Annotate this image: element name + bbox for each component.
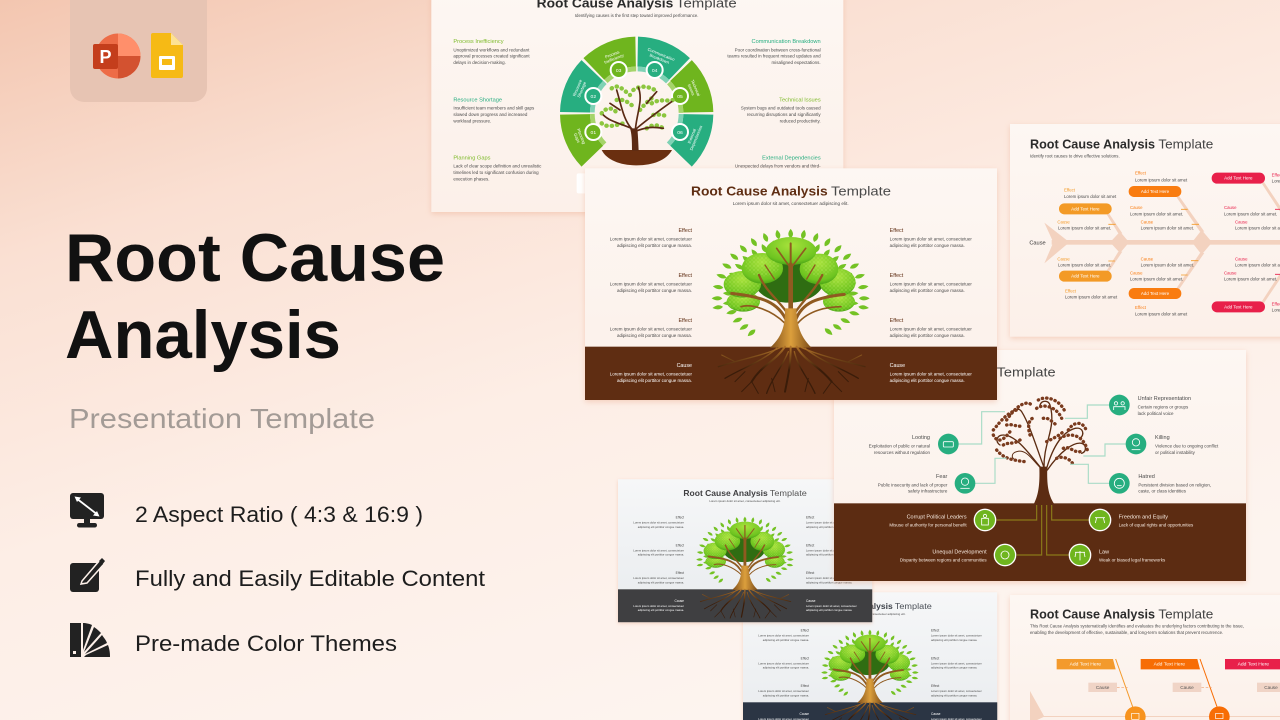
right causes: teams resulted in frequent missed updates and	[727, 54, 821, 59]
heading: Identifying causes is the first step toward improved performance.	[575, 13, 698, 18]
text blocks: Lorem ipsum dolor sit amet, consectetuer	[806, 576, 857, 580]
lower labels: Corrupt Political Leaders	[907, 514, 967, 520]
panel: bottom fishbone slide	[1010, 595, 1280, 720]
text blocks: Lorem ipsum dolor sit amet, consectetuer	[633, 548, 684, 552]
fishbone labels: Cause	[1141, 256, 1154, 261]
left text blocks: adipiscing elit porttitor congue massa.	[617, 378, 692, 383]
wheel centre tree	[602, 87, 673, 165]
fishbone diagram: Cause	[1180, 685, 1194, 690]
upper labels: Persistent division based on religion,	[1138, 482, 1211, 487]
wheel diagram: Dependencies	[689, 125, 703, 151]
upper labels: or political instability	[1155, 450, 1196, 455]
right text blocks: Effect	[890, 273, 904, 279]
wheel diagram: Communication	[647, 47, 676, 62]
wheel diagram: Issues	[687, 83, 696, 96]
right causes: External Dependencies	[762, 155, 821, 161]
text blocks: adipiscing elit porttitor congue massa.	[806, 525, 853, 529]
fishbone labels: Cause	[1235, 219, 1248, 224]
left causes: execution phases.	[453, 176, 489, 181]
left text blocks: Cause	[677, 363, 692, 369]
left causes: slowed down progress and increased	[453, 112, 528, 117]
text blocks: Lorem ipsum dolor sit amet, consectetuer	[758, 634, 809, 638]
right text blocks: Lorem ipsum dolor sit amet, consectetuer	[890, 371, 972, 376]
text blocks: Effect	[801, 684, 809, 688]
fishbone labels: Effect	[1135, 305, 1147, 310]
right causes: Poor coordination between cross-functional	[735, 47, 821, 52]
left text blocks: adipiscing elit porttitor congue massa.	[617, 288, 692, 293]
heading	[1030, 607, 1244, 635]
fishbone labels: Lorem ipsum dolor sit amet.	[1224, 211, 1277, 216]
fishbone pills: Add Text Here	[1141, 291, 1170, 296]
left causes: Insufficient team members and skill gaps	[453, 106, 535, 111]
heading: Template	[895, 602, 932, 611]
fishbone labels: Lorem ipsum dolor sit amet	[1135, 177, 1188, 182]
teal icon circles	[938, 395, 1146, 494]
text blocks: Effect	[676, 543, 684, 547]
fishbone labels: Effect	[1065, 288, 1077, 293]
icon: edit pencil	[70, 558, 105, 592]
tree illustration	[712, 229, 870, 393]
text blocks: adipiscing elit porttitor congue massa.	[638, 608, 684, 612]
left causes: Planning Gaps	[453, 155, 491, 161]
upper labels: caste, or class identities	[1138, 489, 1187, 494]
upper labels: Fear	[936, 474, 948, 480]
wheel diagram: Technical	[690, 79, 701, 97]
fishbone labels: Cause	[1029, 240, 1046, 246]
icon: colour fan	[70, 623, 110, 657]
lower labels: Weak or biased legal frameworks	[1099, 558, 1166, 563]
upper labels: Looting	[912, 435, 930, 441]
lower labels: Lack of equal rights and opportunities	[1119, 523, 1194, 528]
text blocks: Lorem ipsum dolor sit amet, consectetuer	[806, 548, 857, 552]
right text blocks: Effect	[890, 318, 904, 324]
right text blocks	[890, 228, 972, 383]
heading: Root Cause Analysis	[691, 184, 828, 199]
right causes: Unexpected delays from vendors and third-	[735, 164, 821, 169]
upper labels: Killing	[1155, 435, 1170, 441]
upper labels: Exploitation of public or natural	[869, 443, 930, 448]
left text blocks: Effect	[678, 318, 693, 324]
wheel diagram: Process	[604, 49, 620, 59]
title: Root Cause	[65, 220, 445, 296]
heading	[683, 489, 807, 503]
upper labels: lack political voice	[1138, 411, 1174, 416]
heading	[691, 184, 891, 206]
text blocks: Lorem ipsum dolor sit amet, consectetuer	[633, 576, 684, 580]
text blocks	[633, 516, 857, 612]
text blocks: Effect	[801, 629, 809, 633]
wheel diagram: Shortage	[576, 80, 587, 98]
left text blocks: Lorem ipsum dolor sit amet, consectetuer	[610, 326, 693, 331]
fishbone pills: Add Text Here	[1071, 206, 1100, 211]
left text blocks: Effect	[678, 273, 693, 279]
heading	[1030, 137, 1213, 158]
title: Analysis	[65, 297, 341, 373]
connector lines	[958, 405, 1127, 483]
left text blocks: Effect	[678, 228, 693, 234]
fishbone labels: Lorem ipsum dolor sit amet.	[1141, 263, 1194, 268]
wheel diagram: 03	[616, 68, 622, 74]
right causes: reduced productivity.	[780, 118, 821, 123]
lower labels: Law	[1099, 549, 1109, 555]
wheel diagram: 04	[652, 68, 658, 74]
text blocks: Effect	[676, 516, 684, 520]
lower labels	[889, 514, 1194, 563]
right causes: recurring disruptions and significantly	[747, 112, 821, 117]
panel: wheel slide	[431, 0, 843, 212]
text blocks: Effect	[806, 516, 814, 520]
text blocks: adipiscing elit porttitor congue massa.	[763, 666, 809, 670]
fishbone pills: Add Text Here	[1224, 304, 1253, 309]
fishbone diagram: Cause	[1264, 685, 1278, 690]
subtitle: Presentation Template	[69, 403, 375, 434]
heading: Root Cause Analysis	[1030, 607, 1155, 621]
fishbone diagram: Add Text Here	[1070, 662, 1101, 668]
fishbone labels: Lorem ipsum dolor sit amet.	[1141, 226, 1194, 231]
fishbone arrows	[1108, 209, 1280, 275]
upper labels: Unfair Representation	[1138, 396, 1191, 402]
text blocks: Lorem ipsum dolor sit amet, consectetuer	[931, 634, 982, 638]
left causes: Unoptimized workflows and redundant	[453, 47, 530, 52]
icon: Google Slides	[151, 33, 183, 78]
feature: editable content: Fully and Easily Editable Content	[135, 566, 485, 591]
upper labels: resources without regulation	[874, 450, 930, 455]
text blocks: Effect	[931, 629, 939, 633]
right text blocks: Effect	[890, 228, 904, 234]
wheel diagram: 02	[591, 94, 596, 100]
heading: Template	[831, 184, 891, 199]
text blocks: adipiscing elit porttitor congue massa.	[931, 638, 978, 642]
text blocks	[758, 629, 982, 720]
fishbone labels: Lorem ipsum dolor sit amet	[1135, 311, 1188, 316]
left text blocks: Lorem ipsum dolor sit amet, consectetuer	[610, 281, 693, 286]
text blocks: Lorem ipsum dolor sit amet, consectetuer	[758, 689, 809, 693]
text blocks: adipiscing elit porttitor congue massa.	[931, 666, 978, 670]
heading: enabling the development of effective, sustainable, and long-term solutions that prevent recurrence.	[1030, 630, 1223, 635]
fishbone diagram: Add Text Here	[1154, 662, 1185, 668]
fishbone pills: Add Text Here	[1224, 176, 1253, 181]
heading: Lorem ipsum dolor sit amet, consectetuer adipiscing elit.	[834, 612, 906, 616]
lime icon circles	[974, 509, 1111, 566]
text blocks: Lorem ipsum dolor sit amet, consectetuer	[806, 604, 857, 608]
wheel diagram: 01	[591, 130, 596, 136]
text blocks: adipiscing elit porttitor congue massa.	[763, 638, 809, 642]
icon: aspect ratio monitor	[70, 493, 104, 528]
upper labels: Hatred	[1138, 474, 1155, 480]
heading: This Root Cause Analysis systematically identifies and evaluates the underlying factors contributing to the issue,	[1030, 624, 1244, 629]
fishbone labels: Cause	[1057, 219, 1070, 224]
text blocks: Effect	[931, 684, 939, 688]
brown tree	[993, 398, 1087, 504]
heading: Template	[770, 489, 807, 498]
text blocks: adipiscing elit porttitor congue massa.	[806, 580, 853, 584]
fishbone diagram	[1030, 659, 1280, 720]
left text blocks: adipiscing elit porttitor congue massa.	[617, 243, 692, 248]
fishbone labels: Cause	[1235, 256, 1248, 261]
wheel diagram: Inefficiency	[603, 52, 625, 65]
tree illustration	[821, 630, 919, 720]
heading: Lorem ipsum dolor sit amet, consectetuer adipiscing elit.	[733, 201, 849, 206]
right text blocks: Cause	[890, 363, 905, 369]
text blocks: Lorem ipsum dolor sit amet, consectetuer	[931, 661, 982, 665]
text blocks: Lorem ipsum dolor sit amet, consectetuer	[931, 689, 982, 693]
text blocks: Cause	[806, 599, 816, 603]
wheel diagram: Resource	[572, 78, 583, 97]
text blocks: Cause	[800, 712, 809, 716]
fishbone labels: Effect	[1135, 171, 1147, 176]
left causes	[453, 39, 542, 181]
icon: PowerPoint: P	[99, 47, 112, 67]
heading: Template	[997, 365, 1056, 380]
fishbone pills: Add Text Here	[1071, 274, 1100, 279]
text blocks: Lorem ipsum dolor sit amet, consectetuer	[758, 661, 809, 665]
upper labels: Violence due to ongoing conflict	[1155, 443, 1219, 448]
text blocks: Effect	[931, 656, 939, 660]
left causes: delays in decision-making.	[453, 60, 506, 65]
text blocks: Lorem ipsum dolor sit amet, consectetuer	[633, 604, 684, 608]
lower labels: Misuse of authority for personal benefit	[889, 523, 967, 528]
text blocks: adipiscing elit porttitor congue massa.	[763, 693, 809, 697]
lower labels: Unequal Development	[932, 549, 987, 555]
left text blocks	[610, 228, 693, 383]
fishbone labels: Cause	[1130, 270, 1143, 275]
fishbone pills	[1059, 173, 1265, 312]
fishbone labels: Lorem ipsum dolor sit amet	[1064, 194, 1117, 199]
tree illustration	[696, 517, 794, 618]
left text blocks: adipiscing elit porttitor congue massa.	[617, 333, 692, 338]
panel: grey tree slide	[618, 479, 872, 622]
heading	[808, 602, 932, 616]
right causes: Communication Breakdown	[751, 39, 821, 45]
upper labels: Certain regions or groups	[1138, 404, 1189, 409]
title	[65, 220, 445, 373]
text blocks: Lorem ipsum dolor sit amet, consectetuer	[633, 521, 684, 525]
right causes: System bugs and outdated tools caused	[741, 106, 821, 111]
panel: brown tree slide	[834, 350, 1246, 581]
fishbone labels: Cause	[1141, 219, 1154, 224]
wheel diagram: 06	[677, 130, 683, 136]
right causes	[727, 39, 821, 169]
lower labels: Freedom and Equity	[1119, 514, 1168, 520]
fishbone skeleton	[1044, 182, 1280, 303]
panel: navy tree slide	[743, 592, 997, 720]
left text blocks: Lorem ipsum dolor sit amet, consectetuer	[610, 236, 693, 241]
panel: fishbone slide	[1010, 124, 1280, 337]
fishbone labels: Cause	[1224, 270, 1237, 275]
text blocks: Effect	[676, 571, 684, 575]
upper labels: Public insecurity and lack of proper	[878, 482, 948, 487]
text blocks: Effect	[806, 571, 814, 575]
fishbone labels: Cause	[1224, 205, 1237, 210]
fishbone labels: Lorem ipsum dolor sit amet.	[1224, 277, 1277, 282]
left causes: Process Inefficiency	[453, 39, 504, 45]
wheel diagram: Planning	[576, 128, 587, 145]
fishbone diagram: Add Text Here	[1238, 662, 1269, 668]
right text blocks: Lorem ipsum dolor sit amet, consectetuer	[890, 236, 972, 241]
right text blocks: Lorem ipsum dolor sit amet, consectetuer	[890, 281, 972, 286]
text blocks: Effect	[806, 543, 814, 547]
left causes: timelines led to significant confusion during	[453, 170, 539, 175]
heading	[537, 0, 737, 18]
text blocks: Cause	[675, 599, 684, 603]
fishbone labels	[1029, 171, 1280, 316]
small white button	[577, 173, 597, 193]
text blocks: adipiscing elit porttitor congue massa.	[638, 580, 684, 584]
text blocks: Cause	[931, 712, 941, 716]
right text blocks: adipiscing elit porttitor congue massa.	[890, 333, 965, 338]
upper labels: safety infrastructure	[908, 489, 948, 494]
upper labels	[869, 396, 1219, 494]
text blocks: adipiscing elit porttitor congue massa.	[638, 553, 684, 557]
text blocks: adipiscing elit porttitor congue massa.	[931, 693, 978, 697]
fishbone labels: Lorem ipsum dolor sit amet	[1065, 295, 1118, 300]
fishbone labels: Lorem ipsum dolor sit amet.	[1130, 211, 1183, 216]
fishbone diagram: Cause	[1096, 685, 1110, 690]
wheel diagram: Breakdown	[649, 52, 671, 65]
heading: Template	[1158, 607, 1213, 621]
wheel diagram: 05	[677, 94, 683, 100]
right causes: misaligned expectations.	[772, 60, 821, 65]
left causes: Lack of clear scope definition and unrealistic	[453, 164, 542, 169]
text blocks: adipiscing elit porttitor congue massa.	[638, 525, 684, 529]
right text blocks: Lorem ipsum dolor sit amet, consectetuer	[890, 326, 972, 331]
heading: Lorem ipsum dolor sit amet, consectetuer adipiscing elit.	[709, 499, 781, 503]
wheel diagram: Gaps	[573, 132, 581, 143]
wheel diagram	[572, 47, 703, 175]
right text blocks: adipiscing elit porttitor congue massa.	[890, 378, 965, 383]
feature: colour themes: Pre-made Color Themes	[135, 631, 397, 656]
fishbone labels: Cause	[1057, 256, 1070, 261]
feature: aspect ratio: 2 Aspect Ratio ( 4:3 & 16:9 )	[135, 502, 423, 527]
right text blocks: adipiscing elit porttitor congue massa.	[890, 288, 965, 293]
left causes: workload pressure.	[453, 118, 491, 123]
text blocks: Effect	[801, 656, 809, 660]
fishbone labels: Effect	[1064, 188, 1076, 193]
text blocks: Lorem ipsum dolor sit amet, consectetuer	[806, 521, 857, 525]
panel: main brown tree slide	[585, 168, 997, 400]
right causes: Technical Issues	[779, 97, 821, 103]
heading: Identify root causes to drive effective solutions.	[1030, 153, 1120, 158]
right text blocks: adipiscing elit porttitor congue massa.	[890, 243, 965, 248]
fishbone labels: Cause	[1130, 205, 1143, 210]
left causes: approval processes created significant	[453, 54, 530, 59]
fishbone labels: Lorem ipsum dolor sit amet.	[1058, 226, 1111, 231]
heading: Root Cause Analysis	[1030, 137, 1155, 151]
text blocks: adipiscing elit porttitor congue massa.	[806, 553, 853, 557]
fishbone labels: Lorem ipsum dolor sit amet.	[1130, 277, 1183, 282]
text blocks: adipiscing elit porttitor congue massa.	[806, 608, 853, 612]
fishbone labels: Lorem ipsum dolor sit amet.	[1058, 263, 1111, 268]
left text blocks: Lorem ipsum dolor sit amet, consectetuer	[610, 371, 693, 376]
feature list	[70, 493, 485, 657]
heading: Template	[1158, 137, 1213, 151]
fishbone pills: Add Text Here	[1141, 189, 1170, 194]
lower labels: Disparity between regions and communities	[900, 558, 987, 563]
wheel diagram: External	[686, 128, 697, 144]
heading: Root Cause Analysis	[808, 602, 893, 611]
app icons tile	[70, 0, 207, 102]
heading: Root Cause Analysis	[683, 489, 768, 498]
left causes: Resource Shortage	[453, 97, 502, 103]
